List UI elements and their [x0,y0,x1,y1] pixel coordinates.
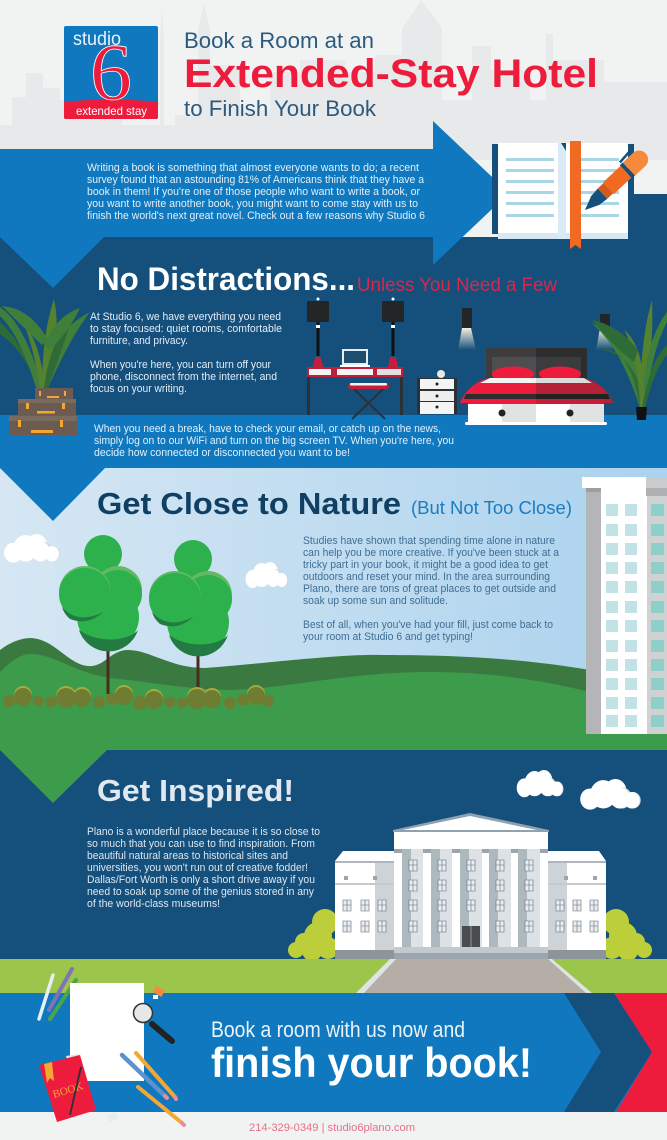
left lamp [307,298,329,367]
text: focus: furniture, and privacy. [90,335,188,347]
vents [344,876,597,880]
pillows [492,366,534,382]
text: focus [90,311,282,395]
nature section background [0,468,667,750]
text: nature: tricky part in your book, it might be a good idea to get [303,559,548,571]
icon: left plant [0,299,90,388]
heading: nature: Get Close to Nature [97,486,401,521]
text: inspired: universities, you won't run out of creative fodder! [87,862,308,874]
stool [348,383,389,419]
text: inspired: Dallas/Fort Worth is only a short drive away if you [87,874,315,886]
text: break [94,423,454,459]
right wing [548,851,606,959]
intro text: you want to write another book, you might want to come stay with us to [87,198,418,210]
triangle pointer [0,237,104,288]
text: focus: focus on your writing. [90,383,187,395]
text: nature: Plano, there are tons of great places to get outside and [303,583,556,595]
icon: tree [149,540,232,696]
icon: pencils top [39,969,76,1019]
icon: right plant [590,300,667,420]
icon: hotel tower [582,477,667,734]
right lamp [382,298,404,367]
left wing [335,851,394,959]
footer contact: 214-329-0349 | studio6plano.com [249,1122,415,1134]
intro text [87,162,425,222]
CTA text: finish your book! [211,1039,532,1086]
icon: clip [107,1112,118,1122]
intro text: Writing a book is something that almost everyone wants to do; a recent [87,162,419,174]
pen [576,144,652,217]
title: Book a Room at an [184,28,374,53]
columns [402,849,540,950]
icon: magnifier [134,1004,172,1041]
icon: cloud [246,562,288,588]
title [184,28,598,121]
triangle pointer [0,468,105,521]
heading: nature: (But Not Too Close) [411,498,572,518]
logo wordmark: studio [73,29,121,50]
text: break: decide how connected or disconnected you want to be! [94,447,350,459]
city skyline [0,0,667,160]
CTA text: Book a room with us now and [211,1017,465,1042]
centre block [394,849,548,950]
intro text: book in them! If you're one of those people who want to write a book, or [87,186,420,198]
text: break: simply log on to our WiFi and turn on the big screen TV. When you're here, you [94,435,454,447]
icon: shrubs [288,909,652,961]
text: nature: Best of all, when you've had your fill, just come back to [303,619,553,631]
windows [343,860,598,932]
heading: no distractions [97,261,557,297]
hills [0,638,667,750]
logo numeral: 6 [90,29,132,117]
text: focus: At Studio 6, we have everything you need [90,311,281,323]
text: focus: When you're here, you can turn off your [90,359,271,371]
CTA text [211,1017,532,1086]
chevron red [614,993,667,1112]
icon: suitcases [9,388,77,435]
text: inspired [87,826,320,910]
ribbon bookmark [570,141,581,249]
laptop [340,349,370,367]
heading: nature [97,486,572,521]
heading: inspired: Get Inspired! [97,773,294,808]
icon: eraser [153,986,165,999]
heading: no distractions: No Distractions... [97,261,355,297]
icon: open book and pen [492,141,652,249]
logo [64,26,158,119]
text: inspired: beautiful natural areas to historical sites and [87,850,288,862]
door [462,926,480,950]
windows [606,504,637,727]
logo tagline: extended stay [76,104,147,118]
icon: wall lamp right [596,314,614,350]
text: inspired: Plano is a wonderful place because it is so close to [87,826,320,838]
text: nature: Studies have shown that spending time alone in nature [303,535,555,547]
icon: tree [59,535,142,694]
icon: museum [335,813,606,959]
icon: cloud [517,770,563,797]
text: nature: outdoors and reset your mind. In the area surrounding [303,571,550,583]
text: inspired: so much that you can use to find inspiration. From [87,838,315,850]
heading: no distractions: Unless You Need a Few [357,275,557,296]
call-to-action band [0,993,667,1112]
icon: red book: BOOK [51,1080,85,1101]
icon: wall lamp left [458,308,476,350]
title: to Finish Your Book [184,96,377,121]
icon: bed [460,348,613,425]
title: Extended-Stay Hotel [184,52,598,96]
inspired section background [0,750,667,959]
text: inspired: of the world-class museums! [87,898,220,910]
intro text: finish the world's next great novel. Check out a few reasons why Studio 6 [87,210,425,222]
bushes [3,685,274,710]
text: nature: can help you be more creative. If you've been stuck at a [303,547,560,559]
icon: nightstand [417,370,457,414]
text: inspired: need to soak up some of the genius stored in any [87,886,314,898]
text: focus: to stay focused: quiet rooms, comfortable [90,323,282,335]
text: nature: your room at Studio 6 and get typing! [303,631,473,643]
text: break: When you need a break, have to check your email, or catch up on the news, [94,423,441,435]
floor [0,415,667,468]
icon: cloud [580,779,641,810]
text: nature [303,535,560,643]
icon: pencils bottom [122,1053,184,1125]
chevron navy [564,993,652,1112]
text: focus: phone, disconnect from the internet, and [90,371,277,383]
mattress base [468,404,502,423]
lawn [0,959,667,993]
intro arrow [0,121,509,265]
paper sheet [70,983,144,1081]
intro text: survey found that an astounding 81% of Americans think that they have a [87,174,425,186]
icon: red book [39,1054,96,1122]
triangle pointer [0,750,107,803]
icon: cloud [4,534,60,563]
steps [394,947,548,953]
text: nature: soak up some sun and solitude. [303,595,448,607]
icon: desk with lamps and laptop [307,298,404,419]
road [356,959,592,993]
header background [0,0,667,200]
footer strip [0,1112,667,1140]
desk top [307,367,403,377]
blanket [460,378,536,403]
navy section background [0,194,667,415]
pediment [393,813,549,832]
